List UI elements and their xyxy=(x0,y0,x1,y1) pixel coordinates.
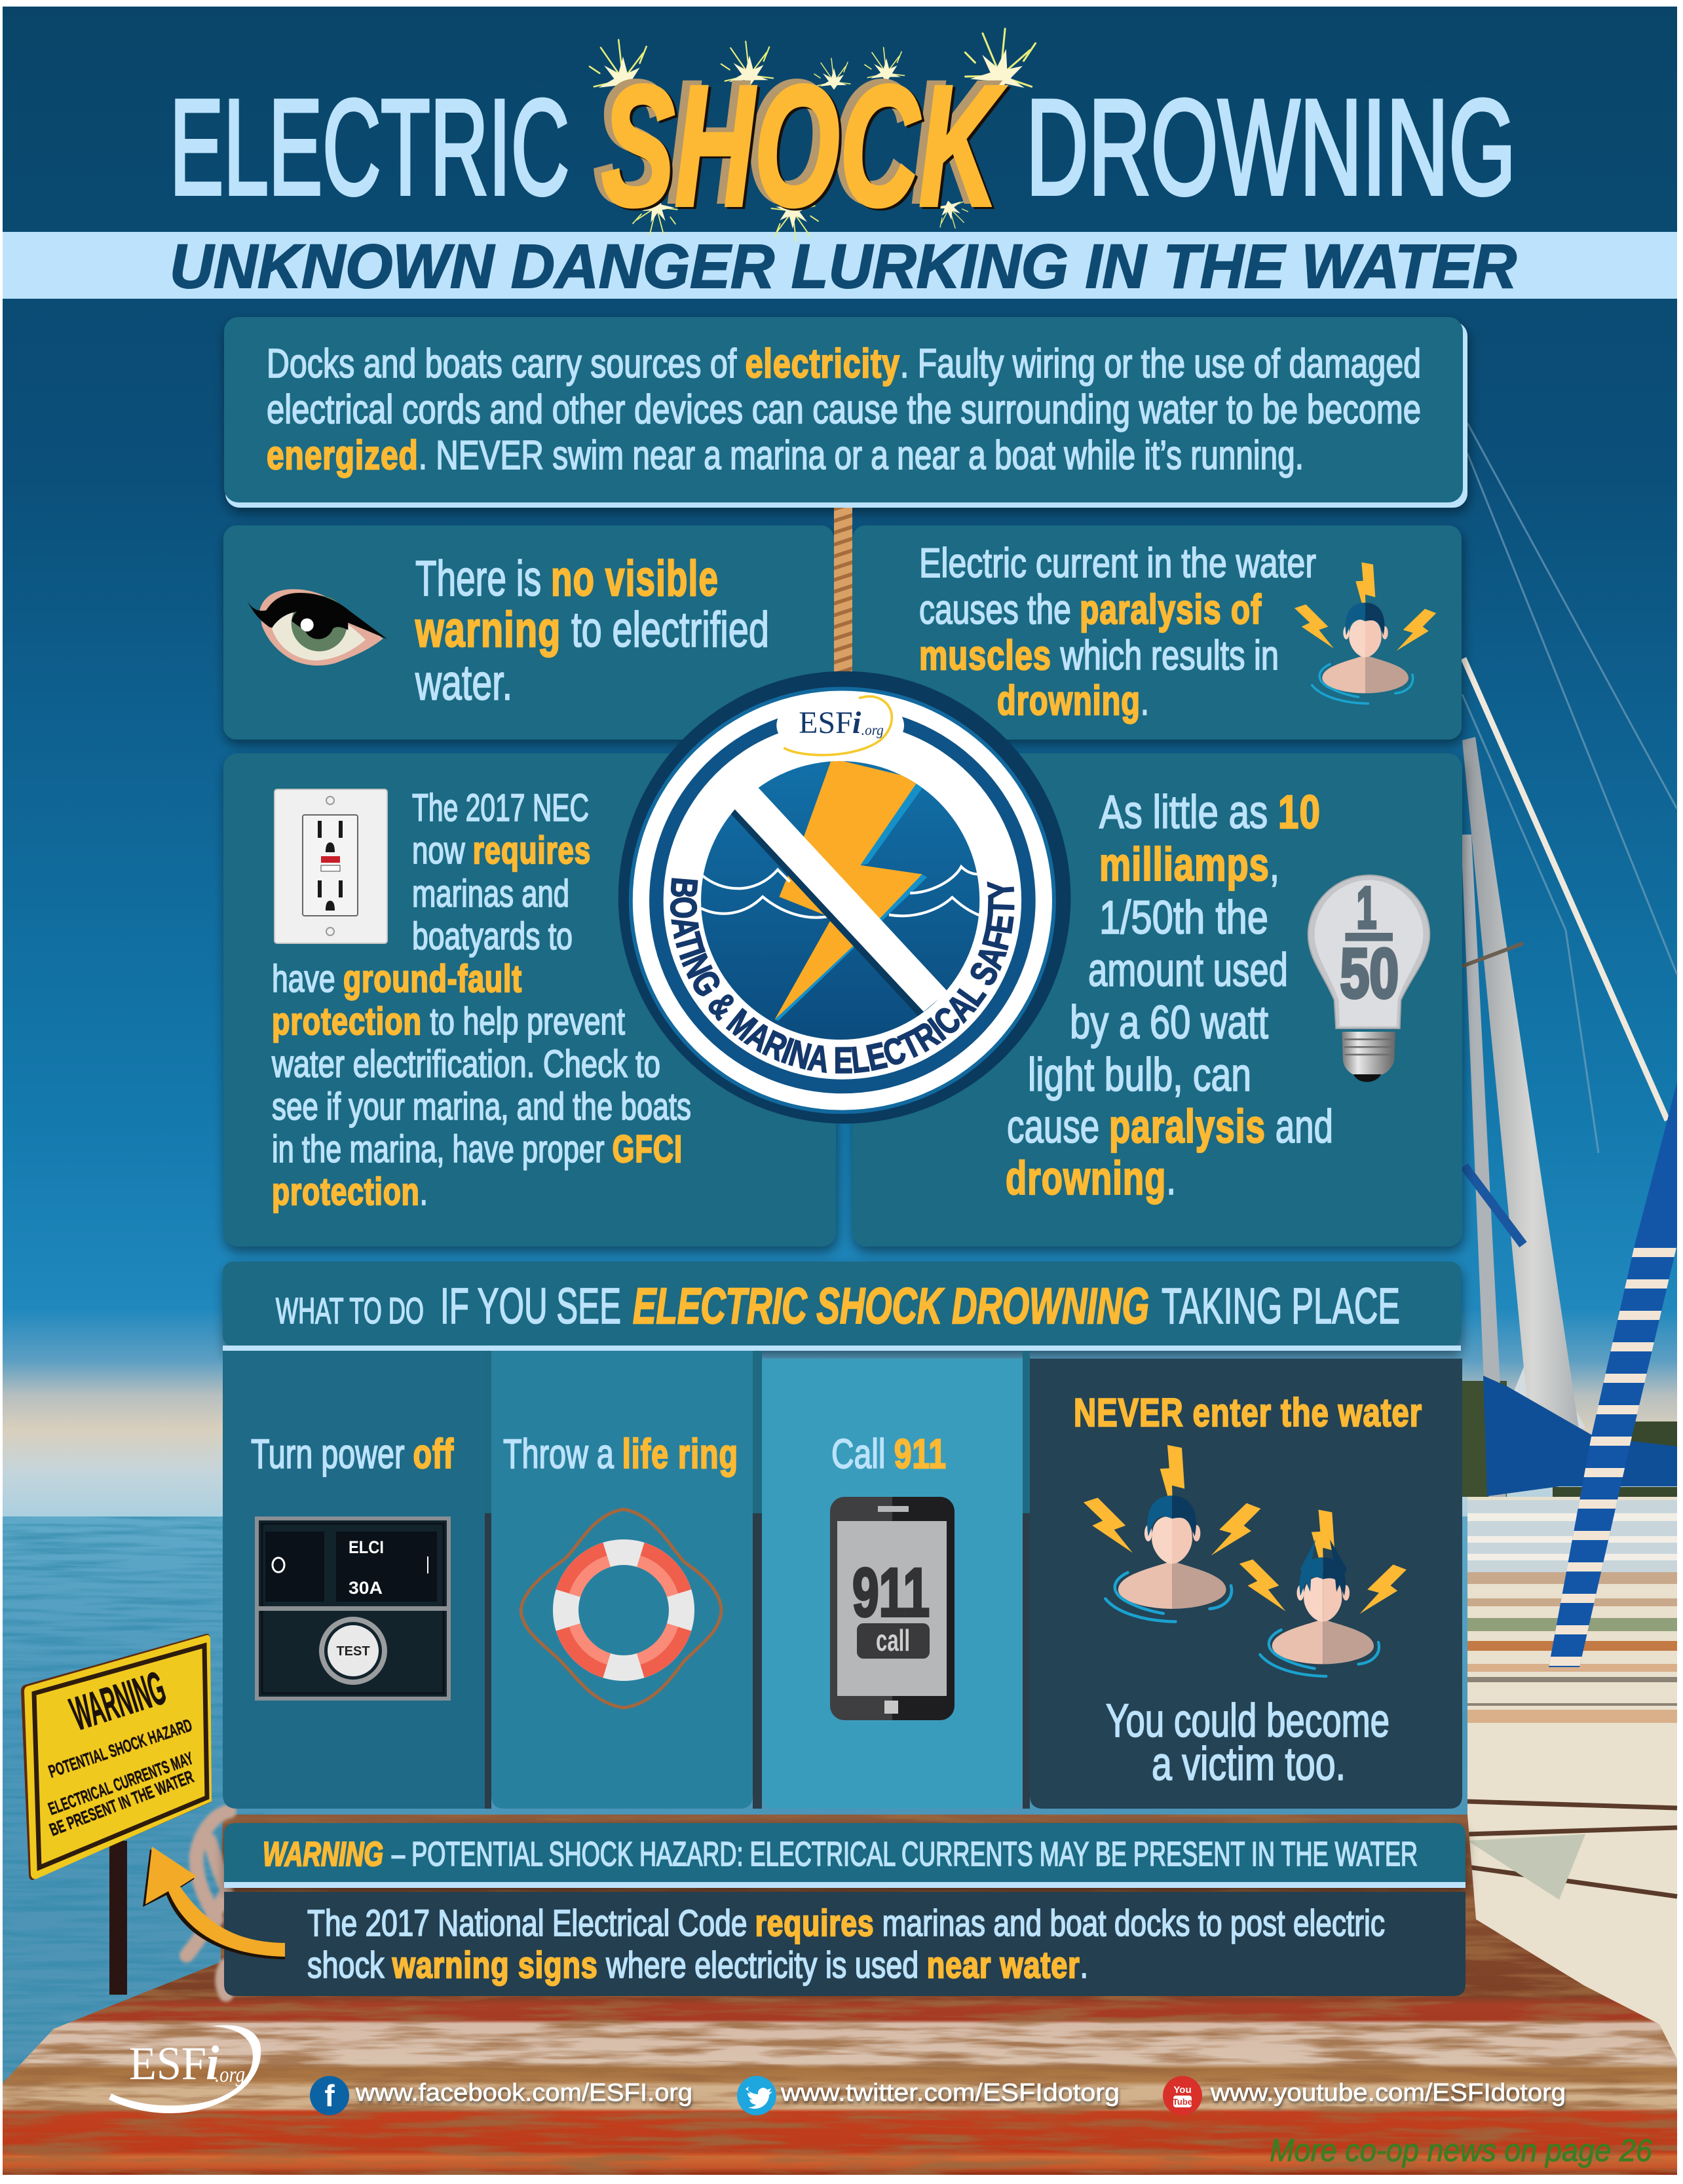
dark gaps between step panels xyxy=(485,1513,1030,1809)
text: ground-fault protection: boatyards to xyxy=(412,915,573,958)
logo: ESFi footer: .org xyxy=(215,2063,245,2087)
social: twitter xyxy=(737,2076,1120,2115)
text: 10 milliamps xyxy=(1006,787,1333,1205)
heading: what to do: IF YOU SEE xyxy=(440,1278,621,1334)
text: ground-fault protection: marinas and xyxy=(412,873,569,915)
icon: life ring xyxy=(521,1509,721,1708)
gaps between step panels xyxy=(485,1351,1030,1513)
icon: breaker panel xyxy=(257,1518,449,1699)
warning sign: POTENTIAL SHOCK HAZARD xyxy=(46,1715,195,1782)
icon: person being shocked xyxy=(1295,562,1436,704)
title: electric: ELECTRIC xyxy=(170,71,569,223)
logo: boating and marina electrical safety: ESF xyxy=(799,706,853,740)
text: you could become a victim too: a victim too. xyxy=(1152,1739,1346,1790)
icon: two people being shocked xyxy=(1084,1445,1407,1676)
title: shock with sparks: SHOCK xyxy=(601,50,1007,242)
step text: turn power off: Turn power off xyxy=(251,1431,454,1477)
panel: no visible warning xyxy=(223,525,834,740)
social: youtube xyxy=(1163,2076,1566,2115)
text: no visible warning xyxy=(415,551,769,711)
text: ground-fault protection: now requires xyxy=(412,829,591,872)
text: ground-fault protection: water electrification. Check to xyxy=(271,1043,660,1085)
title: shock with sparks: SHOCK xyxy=(594,46,1000,238)
footer note: more co-op news: More co-op news on page 26 xyxy=(1270,2134,1652,2168)
text: ground-fault protection xyxy=(271,787,691,1213)
icon: phone calling 911 xyxy=(830,1497,955,1720)
icon: GFCI outlet xyxy=(274,789,387,943)
text: ground-fault protection: protection. xyxy=(272,1171,428,1213)
icon: light bulb one fiftieth: 50 xyxy=(1340,934,1399,1013)
step text: never enter the water: NEVER enter the water xyxy=(1074,1391,1422,1435)
panel: paralysis of muscles xyxy=(852,525,1462,740)
text: 10 milliamps: milliamps, xyxy=(1099,839,1279,891)
text: warning signs required xyxy=(307,1902,1385,1986)
intro text xyxy=(267,341,1421,478)
text: no visible warning: There is no visible xyxy=(415,551,719,607)
intro text: energized. NEVER swim near a marina or a near a boat while it’s running. xyxy=(267,433,1304,478)
text: 10 milliamps: As little as 10 xyxy=(1099,787,1321,838)
rope xyxy=(834,508,852,694)
text: ground-fault protection: protection to help prevent xyxy=(272,1000,625,1043)
text: paralysis of muscles: muscles which results in xyxy=(919,633,1279,679)
icon: light bulb one fiftieth xyxy=(1308,875,1429,1082)
step text: call 911: Call 911 xyxy=(831,1431,947,1477)
icon: breaker panel: TEST xyxy=(336,1644,370,1659)
background photo: wooden dock xyxy=(3,1815,1677,2175)
panel: call 911 xyxy=(762,1359,1023,1809)
social: youtube: Tube xyxy=(1173,2097,1192,2107)
social: youtube: You xyxy=(1173,2084,1192,2096)
logo: ESFi footer xyxy=(109,2025,261,2113)
social: twitter: www.twitter.com/ESFIdotorg xyxy=(780,2079,1120,2107)
logo: ESFi footer: ESF xyxy=(129,2037,206,2090)
text: you could become a victim too: You could become xyxy=(1106,1695,1390,1747)
warning sign: ELECTRICAL CURRENTS MAY xyxy=(46,1748,196,1819)
heading: what to do: WHAT TO DO xyxy=(276,1290,424,1331)
title: shock with sparks xyxy=(590,22,1042,244)
logo: boating and marina electrical safety: i xyxy=(852,706,861,740)
heading: what to do: ELECTRIC SHOCK DROWNING xyxy=(633,1278,1149,1334)
text: paralysis of muscles xyxy=(919,540,1316,724)
social: facebook xyxy=(310,2076,692,2115)
warning sign: BE PRESENT IN THE WATER xyxy=(47,1767,197,1840)
title: shock with sparks: SHOCK xyxy=(604,52,1010,244)
panel: warning heading xyxy=(224,1823,1466,1888)
panel: 10 milliamps xyxy=(852,753,1462,1247)
background photo: water xyxy=(3,1516,1677,2175)
title band xyxy=(3,232,1677,299)
warning sign: WARNING xyxy=(65,1662,172,1741)
social: facebook: f xyxy=(324,2079,335,2113)
text: no visible warning: water. xyxy=(415,655,512,711)
icon: breaker panel: 30A xyxy=(349,1578,383,1598)
text: 10 milliamps: by a 60 watt xyxy=(1070,997,1268,1049)
text: 10 milliamps: 1/50th the xyxy=(1099,892,1268,944)
subtitle: UNKNOWN DANGER LURKING IN THE WATER xyxy=(170,232,1517,301)
text: ground-fault protection: in the marina, have proper GFCI xyxy=(272,1128,683,1171)
panel: ground-fault protection xyxy=(223,753,836,1247)
text: warning signs required: shock warning signs where electricity is used near water. xyxy=(307,1944,1088,1986)
icon: breaker panel: ELCI xyxy=(349,1537,384,1557)
icon: phone calling 911: call xyxy=(876,1623,910,1657)
text: 10 milliamps: drowning. xyxy=(1006,1153,1176,1205)
text: paralysis of muscles: causes the paralysis of xyxy=(919,587,1262,633)
panel: never enter the water xyxy=(1030,1359,1462,1809)
panel: intro xyxy=(224,317,1467,508)
intro text: Docks and boats carry sources of electricity. Faulty wiring or the use of damaged xyxy=(267,341,1421,386)
step text: throw a life ring: Throw a life ring xyxy=(503,1431,738,1477)
text: paralysis of muscles: Electric current in the water xyxy=(919,540,1316,586)
logo: boating and marina electrical safety: .org xyxy=(861,722,884,738)
warning sign post xyxy=(109,1841,127,1995)
text: warning signs required: The 2017 National Electrical Code requires marinas and boat docks to post electric xyxy=(307,1902,1385,1944)
background photo: rigging and sailboat xyxy=(1461,423,1683,2060)
panel: turn power off xyxy=(223,1351,485,1809)
heading: what to do xyxy=(276,1278,1400,1334)
arrow to warning sign xyxy=(143,1847,285,1959)
text: ground-fault protection: see if your marina, and the boats xyxy=(272,1085,691,1128)
logo: boating and marina electrical safety: BOATING & MARINA ELECTRICAL SAFETY xyxy=(670,878,1014,1074)
social: facebook: www.facebook.com/ESFI.org xyxy=(355,2079,692,2107)
logo: ESFi footer: i xyxy=(206,2037,219,2090)
text: no visible warning: warning to electrified xyxy=(415,602,769,658)
social: youtube: www.youtube.com/ESFIdotorg xyxy=(1210,2079,1566,2107)
icon: phone calling 911: 911 xyxy=(852,1554,930,1631)
icon: eye xyxy=(246,589,387,666)
rope coil on dock xyxy=(187,1811,229,1995)
panel: what to do heading xyxy=(223,1262,1461,1351)
text: paralysis of muscles: drowning. xyxy=(997,678,1149,724)
panel: warning signs required xyxy=(224,1892,1466,1996)
heading: what to do: TAKING PLACE xyxy=(1162,1278,1400,1334)
logo: boating and marina electrical safety xyxy=(618,671,1070,1124)
background photo: sky xyxy=(3,7,1677,1520)
warning sign xyxy=(21,1634,212,1880)
text: ground-fault protection: The 2017 NEC xyxy=(412,787,589,829)
text: ground-fault protection: have ground-fault xyxy=(272,958,522,1000)
icon: light bulb one fiftieth: 1 xyxy=(1357,876,1376,941)
text: 10 milliamps: cause paralysis and xyxy=(1007,1101,1333,1153)
text: 10 milliamps: light bulb, can xyxy=(1028,1049,1251,1101)
text: you could become a victim too xyxy=(1106,1695,1390,1790)
panel: throw a life ring xyxy=(491,1351,753,1809)
warning heading text: WARNING xyxy=(263,1836,383,1873)
text: 10 milliamps: amount used xyxy=(1088,945,1288,996)
